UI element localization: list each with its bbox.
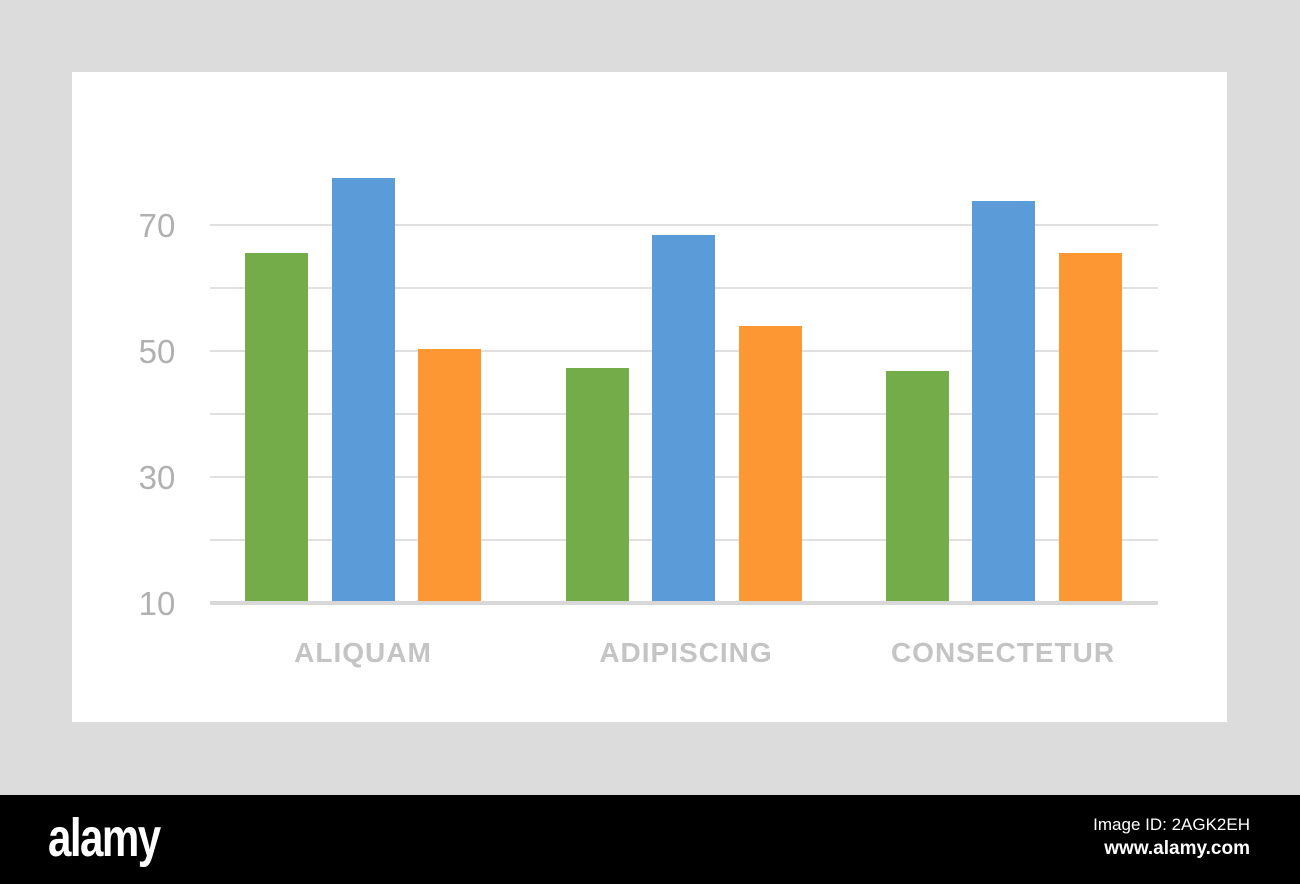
footer bar	[0, 795, 1300, 884]
url: www.alamy.com	[1104, 838, 1250, 859]
y axis labels: 10	[139, 585, 175, 622]
bars: aliquam	[245, 178, 481, 602]
y axis labels: 70	[139, 207, 175, 244]
logo text: alamy	[48, 808, 160, 868]
category labels: ALIQUAM	[294, 637, 432, 668]
image id: Image ID: 2AGK2EH	[1093, 815, 1250, 834]
bars: consectetur	[886, 201, 1122, 602]
category labels	[294, 637, 1115, 668]
bars: adipiscing	[566, 235, 802, 602]
y axis labels: 30	[139, 459, 175, 496]
category labels: CONSECTETUR	[891, 637, 1115, 668]
y axis labels: 50	[139, 333, 175, 370]
category labels: ADIPISCING	[599, 637, 773, 668]
panel: chart card	[72, 72, 1227, 722]
y axis labels	[139, 207, 175, 622]
